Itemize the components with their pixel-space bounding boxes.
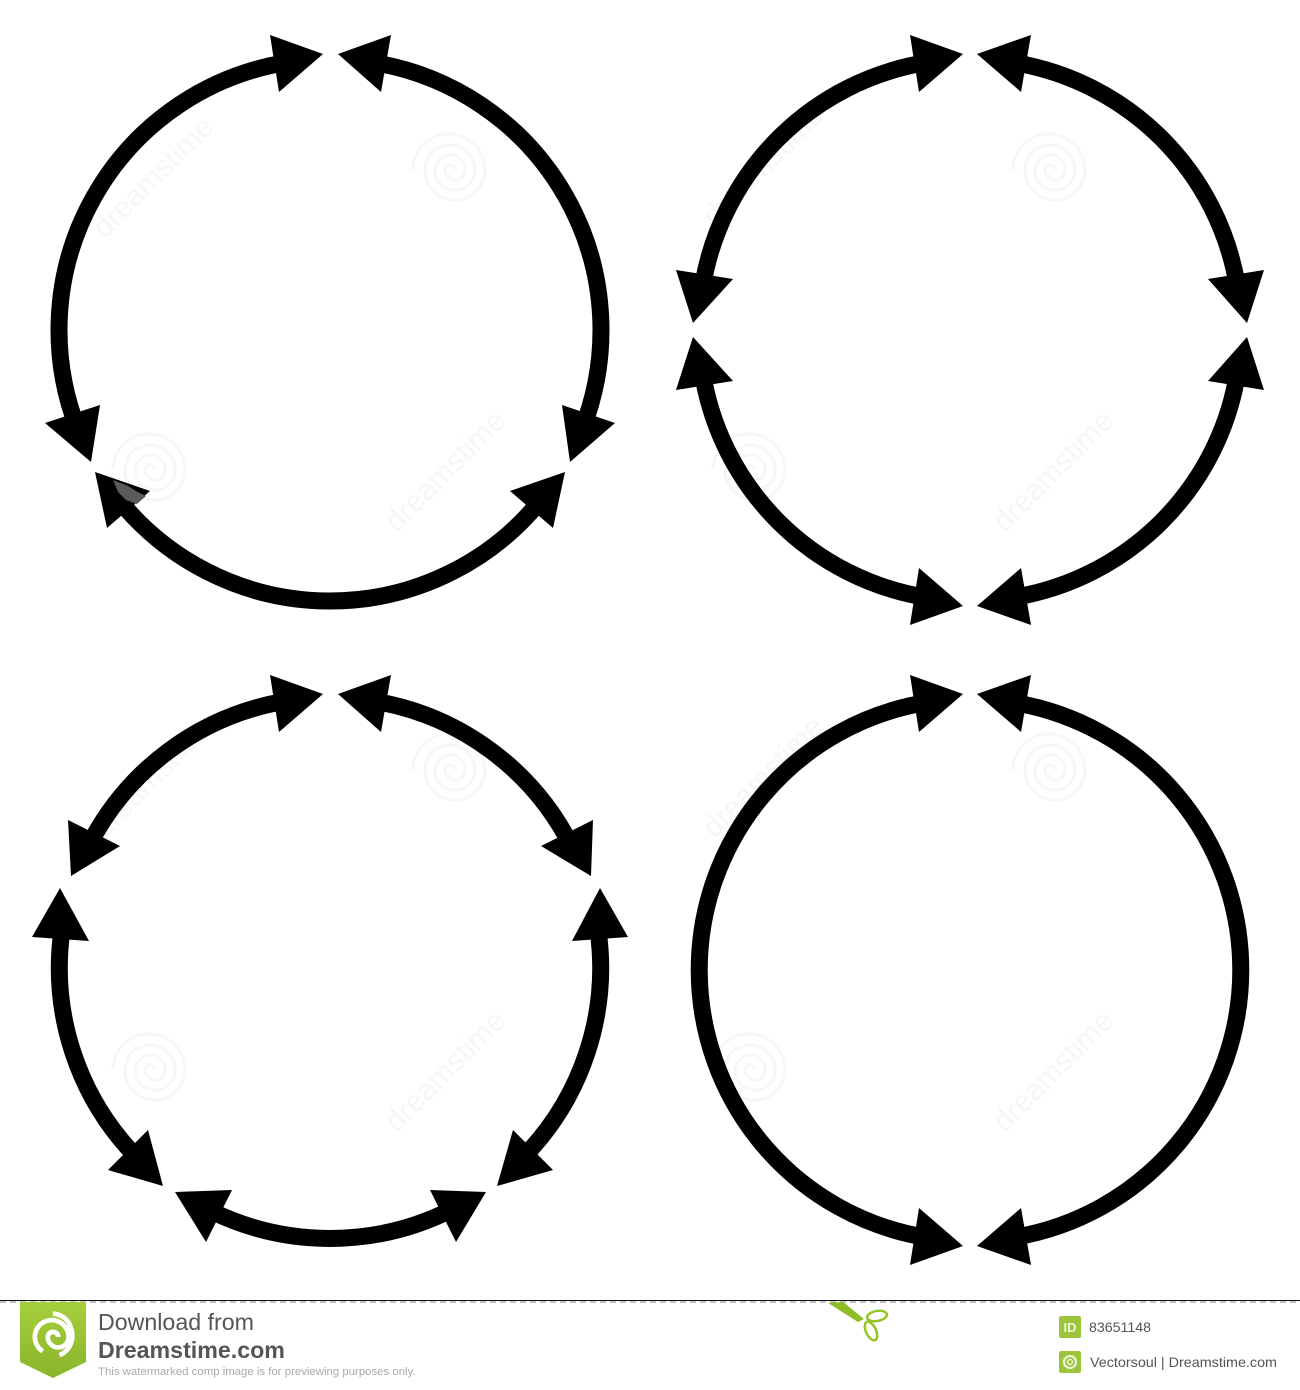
- icon: id badge: [1059, 1316, 1081, 1338]
- arrow: left segment: [32, 888, 163, 1186]
- circle: four-segment arrow ring (top right): [676, 35, 1264, 625]
- text: preview notice: This watermarked comp image is for previewing purposes only.: [98, 1366, 416, 1378]
- icon: green scissors: [828, 1302, 888, 1342]
- arrow: upper right segment: [338, 35, 615, 462]
- circle: two-segment arrow ring (bottom right): [699, 675, 1241, 1265]
- arrow: bottom segment: [175, 1190, 486, 1242]
- arrow: upper left segment: [68, 675, 323, 876]
- watermark: repeated stock-photo marks: dreamstime: [86, 110, 220, 244]
- circle: three-segment arrow ring (top left): [45, 35, 615, 601]
- arrow: right segment: [497, 888, 628, 1186]
- arrow: bottom segment: [95, 472, 565, 601]
- watermark: repeated stock-photo marks: dreamstime: [696, 710, 830, 844]
- watermark: repeated stock-photo marks: dreamstime: [986, 1004, 1120, 1138]
- arrow: left half: [699, 675, 963, 1265]
- watermark: repeated stock-photo marks: dreamstime: [986, 404, 1120, 538]
- watermark: repeated stock-photo marks: dreamstime: [378, 1004, 512, 1138]
- arrow: right half: [977, 675, 1241, 1265]
- footer: stock photo download bar: [0, 1300, 1300, 1378]
- arrow: upper left segment: [676, 35, 963, 323]
- text: author credit: Vectorsoul | Dreamstime.com: [1090, 1354, 1277, 1370]
- icon: copyright badge: [1059, 1351, 1081, 1373]
- text: image id: 83651148: [1089, 1320, 1151, 1336]
- heading: download from: Download from: [98, 1309, 254, 1335]
- icon: green ribbon logo: [20, 1302, 86, 1378]
- arrow: lower right segment: [977, 337, 1264, 625]
- arrow: lower left segment: [676, 337, 963, 625]
- watermark: repeated stock-photo marks: [86, 98, 1120, 1138]
- watermark: repeated stock-photo marks: dreamstime: [86, 710, 220, 844]
- arrow: upper left segment: [45, 35, 323, 462]
- arrow: upper right segment: [338, 675, 593, 876]
- watermark: repeated stock-photo marks: dreamstime: [696, 98, 830, 232]
- icon: id badge: ID: [1064, 1320, 1076, 1335]
- watermark: repeated stock-photo marks: dreamstime: [378, 404, 512, 538]
- circle: five-segment arrow ring (bottom left): [32, 675, 628, 1242]
- arrow: upper right segment: [977, 35, 1264, 323]
- heading: brand name: Dreamstime.com: [98, 1337, 285, 1363]
